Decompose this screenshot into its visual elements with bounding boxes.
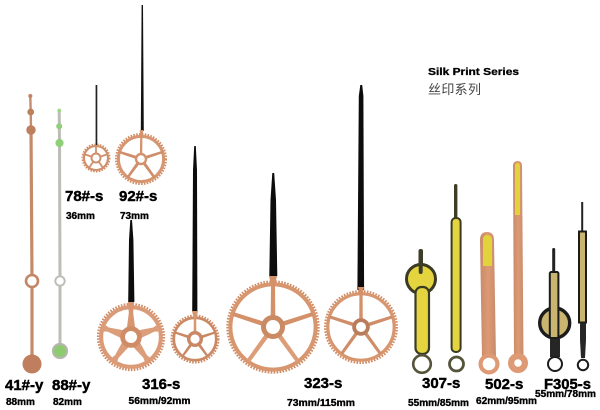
heading: Silk Print Series: Silk Print Series (428, 66, 519, 78)
label: 502-s: 62mm/95mm (476, 396, 537, 407)
label: 323-s: 73mm/115mm (287, 398, 355, 409)
label: F305-s: F305-s (544, 376, 591, 393)
hand: F305-s short (540, 248, 570, 371)
label: 307-s (408, 375, 469, 409)
gear hand: 323-s large (325, 85, 397, 363)
label: 88#-y (52, 377, 91, 408)
label: 307-s: 307-s (422, 375, 460, 392)
label: 78#-s: 78#-s (65, 188, 103, 205)
gear hand: 92#-s (116, 5, 166, 184)
label: 88#-y: 82mm (53, 397, 82, 408)
label: 41#-y: 41#-y (5, 377, 44, 394)
label: 502-s: 502-s (485, 376, 523, 393)
gear hand: 316-s small (98, 220, 164, 370)
gear hand: 323-s small (228, 173, 318, 372)
label: 502-s (476, 376, 537, 407)
label: 92#-s: 92#-s (119, 188, 157, 205)
label: 78#-s (65, 188, 103, 222)
hand set: 41#-y (22, 94, 42, 374)
label: F305-s: 55mm/78mm (535, 389, 596, 400)
label: F305-s (535, 376, 596, 400)
label: 316-s (128, 376, 191, 407)
gear hand: 316-s large (172, 146, 218, 362)
label: 323-s: 323-s (304, 375, 342, 392)
label: 92#-s: 73mm (120, 211, 149, 222)
hand set: 88#-y (53, 109, 67, 358)
label: 307-s: 55mm/85mm (408, 398, 469, 409)
hand: 307-s short (406, 249, 436, 373)
label: 316-s: 56mm/92mm (128, 396, 191, 407)
label: 323-s (287, 375, 355, 409)
heading: Silk Print Series (428, 66, 519, 97)
gear hand: 78#-s (82, 85, 110, 172)
label: 41#-y: 88mm (6, 397, 35, 408)
hand: 502-s long (511, 161, 525, 370)
heading: Silk Print Series: 丝印系列 (428, 82, 481, 97)
hand: F305-s long (578, 202, 588, 370)
hand: 502-s short (480, 232, 497, 372)
label: 92#-s (119, 188, 157, 222)
label: 88#-y: 88#-y (52, 377, 91, 394)
label: 316-s: 316-s (142, 376, 180, 393)
label: 78#-s: 36mm (66, 211, 95, 222)
label: 41#-y (5, 377, 44, 408)
hand: 307-s long (450, 184, 464, 371)
